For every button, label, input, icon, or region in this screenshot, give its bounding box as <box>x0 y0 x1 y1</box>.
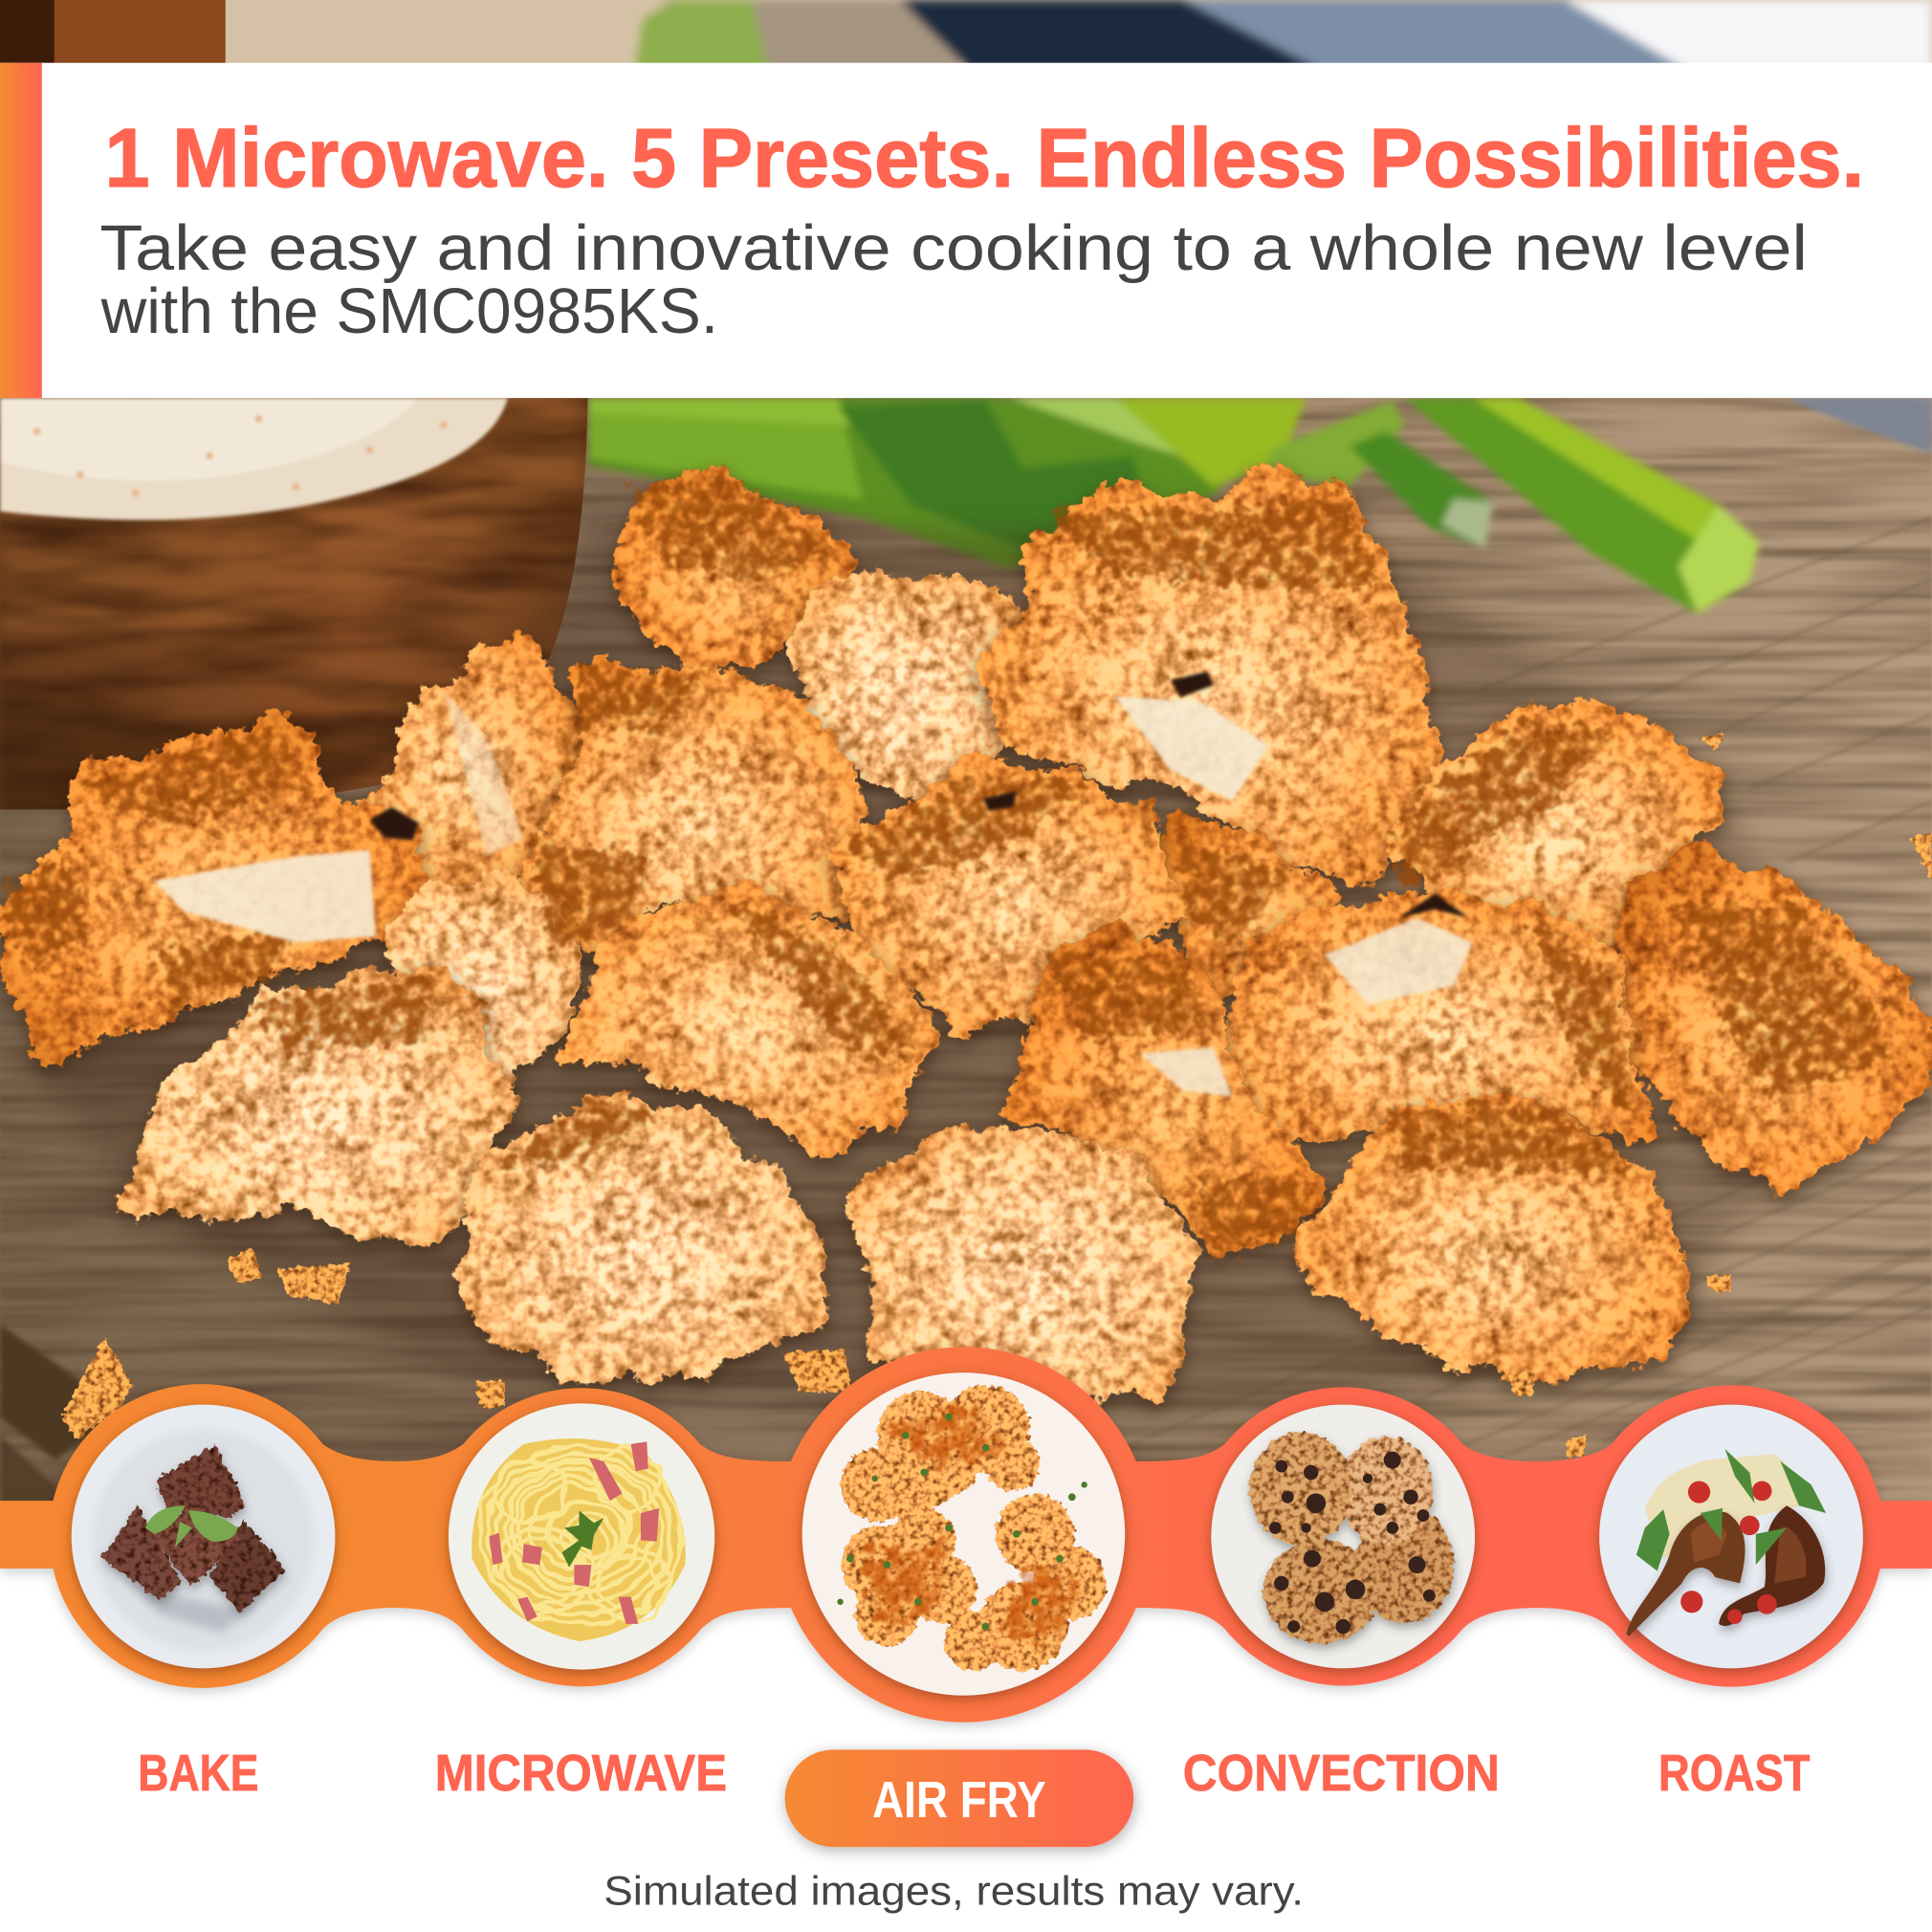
food: spaghetti <box>472 1438 686 1641</box>
food: duck legs <box>1627 1505 1825 1636</box>
preset ribbon <box>0 1347 1932 1723</box>
label: roast: ROAST <box>1658 1745 1810 1802</box>
plate: roast (duck legs) <box>1599 1405 1863 1668</box>
subtitle <box>99 212 1808 347</box>
food: sauce <box>0 398 508 520</box>
disclaimer: Simulated images, results may vary. <box>604 1870 1304 1915</box>
photo: shadow under cauliflower <box>25 517 1898 1417</box>
label: convection: CONVECTION <box>1183 1745 1500 1802</box>
food: parsley <box>561 1510 604 1568</box>
food: potatoes <box>1645 1454 1801 1559</box>
food: brownies <box>101 1444 286 1613</box>
plate: convection (cookies) <box>1211 1405 1475 1668</box>
food: bacon bits <box>489 1441 659 1624</box>
photo: charred spots <box>369 671 1469 918</box>
subtitle: Take easy and innovative cooking to a whole new level <box>99 212 1808 284</box>
food: herb flecks <box>837 1414 1087 1630</box>
header accent bar <box>0 63 42 398</box>
label: air fry pill: AIR FRY <box>872 1771 1046 1829</box>
food: mint leaves <box>145 1505 238 1548</box>
photo: scattered crumbs <box>61 735 1932 1457</box>
photo: pale stems <box>154 690 1472 1097</box>
label: bake: BAKE <box>138 1745 259 1802</box>
photo: blurred top strip <box>0 0 1932 63</box>
plate: bake (brownies) <box>72 1405 335 1668</box>
title: 1 Microwave. 5 Presets. Endless Possibilities. <box>105 111 1864 205</box>
food: chocolate chip cookies <box>1249 1432 1454 1644</box>
food: roasted cauliflower <box>841 1385 1107 1671</box>
food: cherry tomatoes <box>1680 1481 1777 1624</box>
header panel <box>0 63 1932 398</box>
photo: browned crust patches <box>0 480 1898 1251</box>
label: microwave: MICROWAVE <box>435 1745 727 1802</box>
subtitle: with the SMC0985KS. <box>100 275 718 347</box>
plate: microwave (spaghetti) <box>449 1403 714 1670</box>
photo: wood board <box>0 394 1932 1569</box>
photo: wooden bowl with sauce <box>0 394 591 820</box>
food: herb leaves <box>1636 1449 1826 1571</box>
label: air fry pill <box>785 1749 1133 1847</box>
plate: air fry (cauliflower steaks) <box>802 1372 1125 1696</box>
photo: cauliflower florets <box>0 469 1932 1405</box>
photo: celery sticks <box>589 398 1760 614</box>
